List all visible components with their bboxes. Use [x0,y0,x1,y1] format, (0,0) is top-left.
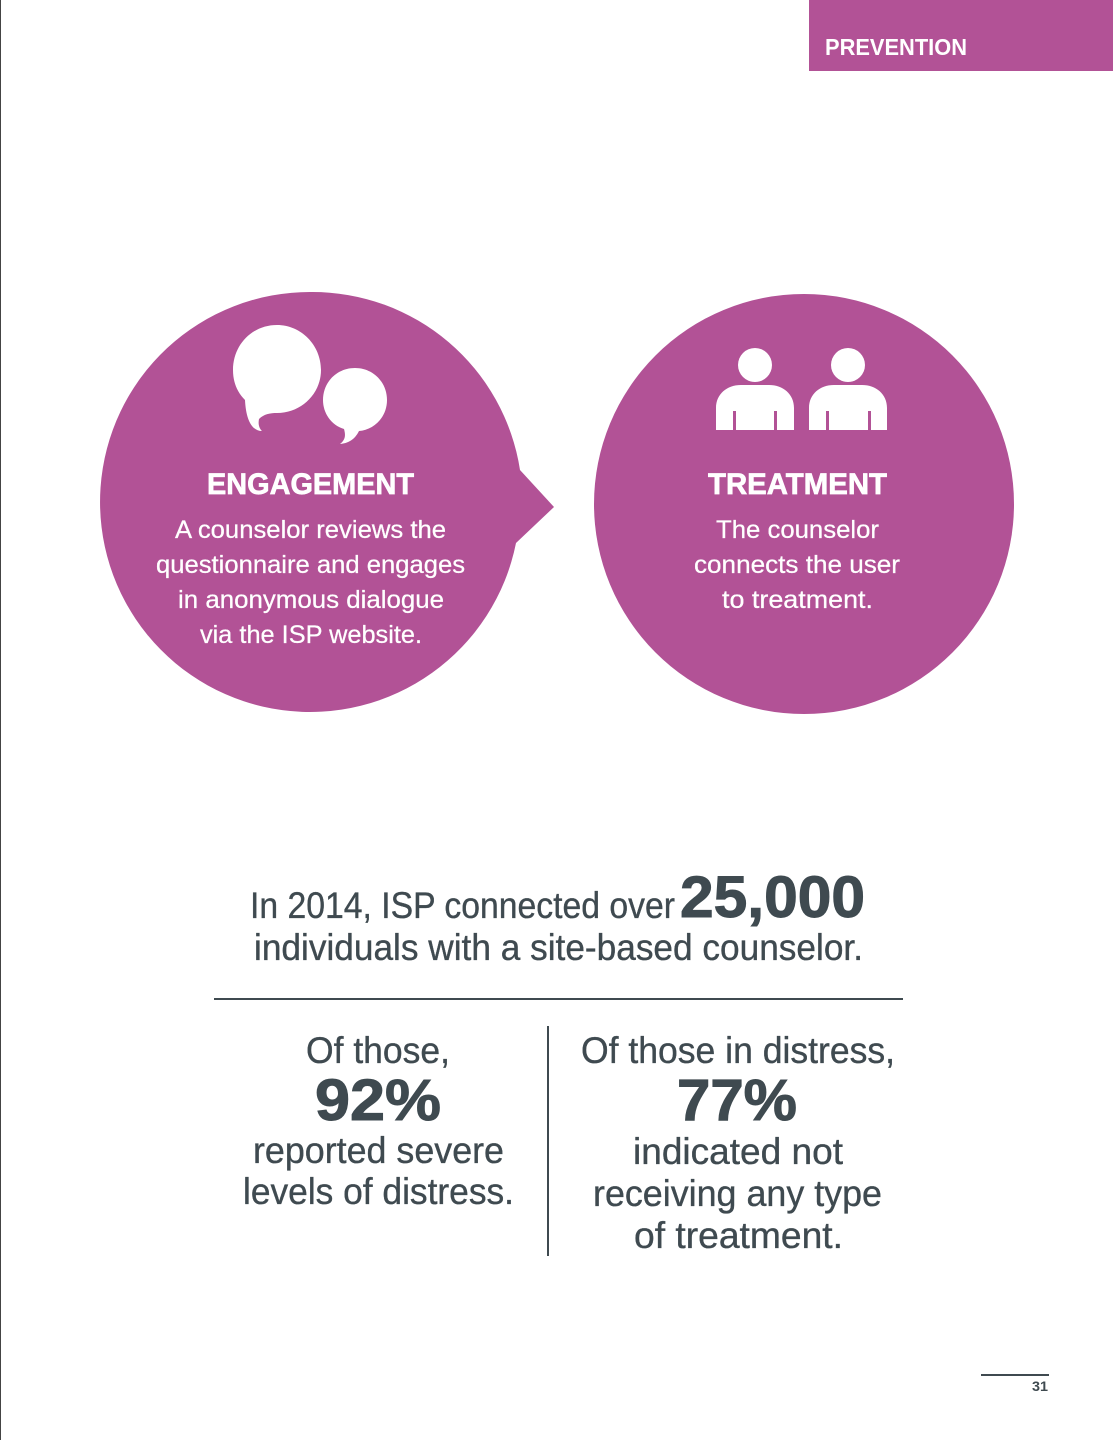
text block: engagement description: A counselor reviews the [175,516,446,544]
text block: treatment description: The counselor [716,516,879,544]
icon: two people [716,348,887,430]
headline statistic: 25,000 [680,865,865,930]
text block: treatment description: to treatment. [722,586,873,614]
page number: 31 [1032,1378,1048,1394]
statistic: 77% [581,1030,895,1256]
statistic: 77%: receiving any type [593,1173,882,1214]
page number [981,1374,1049,1394]
section tab: prevention: PREVENTION [825,34,967,60]
statistic: 92%: Of those, [306,1030,450,1071]
heading: treatment: TREATMENT [708,468,887,501]
text block: engagement description: via the ISP website. [200,621,422,649]
headline statistic [250,865,865,968]
statistic: 77%: indicated not [633,1131,844,1172]
text block: treatment description: connects the user [694,551,900,579]
text block: engagement description: questionnaire and engages [156,551,465,579]
heading: engagement: ENGAGEMENT [207,468,414,501]
headline statistic: individuals with a site-based counselor. [254,927,863,968]
statistic: 77%: of treatment. [634,1215,843,1256]
text block: engagement description [156,516,465,649]
statistic: 77%: 77% [677,1068,797,1133]
speech-bubble circle with pointer [100,292,554,712]
panel: treatment [594,294,1014,714]
section tab: prevention [809,0,1113,71]
panel: engagement [100,292,554,712]
text block: engagement description: in anonymous dialogue [178,586,444,614]
circle [594,294,1014,714]
text block: treatment description [694,516,900,614]
icon: speech bubbles [233,325,387,444]
statistic: 92% [243,1030,514,1212]
statistic: 92%: levels of distress. [243,1171,514,1212]
statistic: 77%: Of those in distress, [581,1030,895,1071]
headline statistic: In 2014, ISP connected over [250,885,675,926]
statistic: 92%: reported severe [253,1130,504,1171]
statistic: 92%: 92% [315,1068,441,1133]
